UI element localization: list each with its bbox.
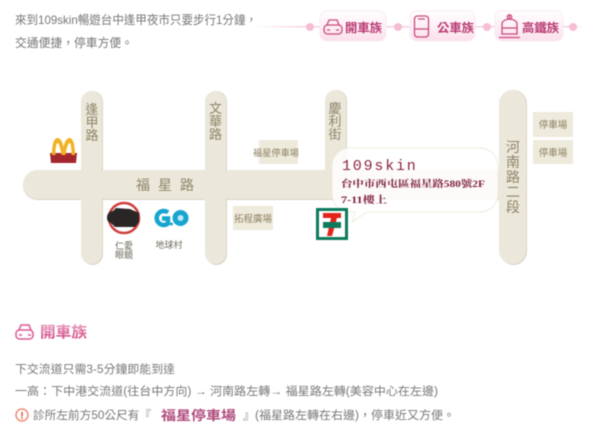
road: 逢甲路: 逢 <box>85 102 99 117</box>
icon: exclamation: ! <box>20 411 24 422</box>
parking: 停車場 upper <box>533 112 573 137</box>
driving directions: 』(福星路左轉在右邊)，停車近又方便。 <box>243 408 455 422</box>
parking: 停車場 lower: 停車場 <box>539 147 568 159</box>
road: 逢甲路 <box>70 91 115 265</box>
icon: McDonald's <box>50 138 77 163</box>
road: 逢甲路: 甲 <box>85 115 99 130</box>
parking: 拓程廣場: 拓程廣場 <box>234 213 272 225</box>
icon: 地球村 GO: 地球村 <box>155 239 183 250</box>
icon: car <box>16 325 33 339</box>
road: 文華路 <box>195 91 240 265</box>
road: 河南路二段: 路 <box>506 169 520 185</box>
callout: 109skin address <box>332 148 498 222</box>
callout: 109skin address: 台中市西屯區福星路580號2F <box>341 178 485 190</box>
pill: 公車族: 公車族 <box>437 20 474 35</box>
pill: 開車族 <box>320 11 386 41</box>
callout: 109skin address: 7-11樓上 <box>341 194 388 206</box>
road: 文華路: 華 <box>209 114 222 129</box>
callout: 109skin address: 109skin <box>342 158 418 175</box>
transport navigation <box>255 11 585 41</box>
parking: 福星停車場 <box>253 140 299 164</box>
intro text: 交通便捷，停車方便。 <box>15 35 133 50</box>
icon: 仁愛眼鏡 <box>107 203 139 260</box>
pill: 開車族: 開車族 <box>345 20 382 35</box>
icon: 仁愛眼鏡: 仁愛 <box>115 240 133 251</box>
icon: exclamation <box>16 409 28 422</box>
road: 文華路: 文 <box>209 101 222 116</box>
road: 福星路: 福 星 路 <box>136 177 194 193</box>
driving directions: 診所左前方50公尺有『 <box>33 408 152 422</box>
driving directions <box>15 362 455 423</box>
road: 慶利街: 街 <box>328 127 342 142</box>
section heading: 開車族: 開車族 <box>40 323 87 341</box>
road: 河南路二段: 段 <box>506 199 520 215</box>
road: 慶利街: 利 <box>328 114 342 129</box>
road: 文華路: 路 <box>209 127 222 142</box>
parking: 停車場 lower <box>533 140 573 164</box>
icon: 地球村 GO <box>155 210 188 250</box>
road: 逢甲路: 路 <box>85 128 99 143</box>
road: 慶利街: 慶 <box>328 101 342 116</box>
section heading: 開車族 <box>16 323 87 341</box>
icon: 仁愛眼鏡: 眼鏡 <box>115 249 133 260</box>
pill: 公車族 <box>410 11 475 41</box>
intro text <box>15 12 257 50</box>
road: 慶利街 <box>325 90 347 180</box>
driving directions: 福星停車場 <box>161 408 236 423</box>
road map <box>23 90 573 265</box>
road: 河南路二段: 河 <box>506 139 520 155</box>
road: 河南路二段: 南 <box>506 154 520 170</box>
parking: 拓程廣場 <box>233 206 273 230</box>
intro text: 來到109skin暢遊台中逢甲夜市只要步行1分鐘， <box>15 12 257 27</box>
icon: 7-ELEVEn <box>316 208 348 240</box>
driving directions: 下交流道只需3-5分鐘即能到達 <box>15 362 176 376</box>
parking: 停車場 upper: 停車場 <box>539 119 568 131</box>
parking: 福星停車場: 福星停車場 <box>253 147 299 158</box>
road: 福星路 <box>23 170 513 200</box>
road: 河南路二段 <box>499 90 527 265</box>
road: 河南路二段: 二 <box>506 184 520 200</box>
pill: 高鐵族 <box>495 11 563 41</box>
pill: 高鐵族: 高鐵族 <box>522 20 559 35</box>
driving directions: 一高：下中港交流道(往台中方向) → 河南路左轉→ 福星路左轉(美容中心在左邊) <box>15 384 438 398</box>
